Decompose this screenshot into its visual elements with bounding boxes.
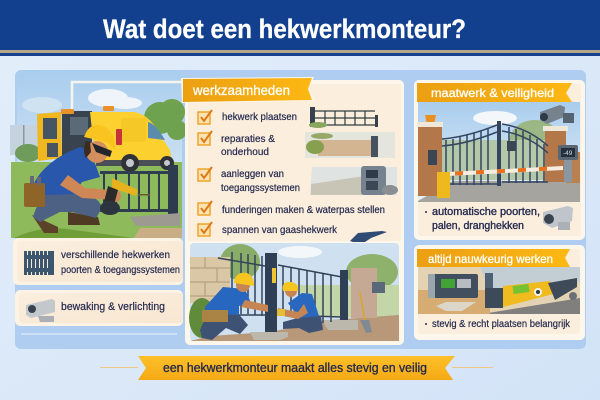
photo: laser and spirit level — [418, 267, 580, 314]
photo: automatic gate — [417, 102, 580, 202]
arms — [60, 175, 113, 200]
panel: werkzaamheden — [181, 77, 404, 345]
text: palen, dranghekken — [432, 220, 524, 232]
trousers — [33, 188, 102, 222]
item: aanleggen — [198, 166, 398, 195]
wall — [189, 257, 230, 338]
heading ribbon — [417, 249, 570, 267]
heading ribbon — [417, 83, 572, 102]
tree — [144, 99, 187, 140]
gate — [442, 124, 548, 185]
worker — [24, 125, 150, 233]
left worker — [200, 273, 268, 340]
ground — [190, 315, 399, 341]
digital meter — [428, 274, 478, 298]
icon: camera — [26, 299, 55, 322]
head — [86, 141, 108, 163]
heading ribbon: werkzaamheden — [192, 82, 290, 98]
icon: camera — [543, 206, 573, 230]
grass — [11, 162, 182, 238]
drill — [112, 178, 138, 196]
item: funderingen — [198, 201, 385, 216]
post — [485, 273, 493, 297]
heading ribbon — [181, 77, 315, 103]
left pillar — [418, 126, 442, 196]
sky — [17, 70, 182, 238]
item: reparaties — [198, 131, 395, 158]
item: gaashekwerk — [198, 222, 387, 242]
van — [37, 106, 174, 172]
shirt — [33, 147, 100, 195]
item: reparaties: onderhoud — [221, 146, 269, 158]
item: aanleggen: aanleggen van — [221, 168, 284, 180]
footer text: een hekwerkmonteur maakt alles stevig en veilig — [163, 360, 427, 375]
camera — [540, 105, 574, 124]
item: gaashekwerk: spannen van gaashekwerk — [222, 224, 338, 236]
card: fences and gates — [13, 238, 183, 285]
card: surveillance and lighting — [15, 290, 183, 326]
right pillar — [545, 130, 566, 182]
hard hat — [84, 125, 115, 150]
title: Wat doet een hekwerkmonteur? — [103, 14, 466, 44]
barrier — [437, 166, 563, 198]
panel: info cards — [13, 238, 183, 334]
item: funderingen: funderingen maken & waterpas stellen — [222, 204, 385, 216]
keypad post — [564, 158, 572, 182]
spirit level — [503, 278, 577, 307]
text: automatische poorten, — [432, 206, 540, 218]
card: fences and gates: poorten & toegangssystemen — [61, 264, 180, 276]
icon: chain-link fence — [10, 125, 38, 155]
panel: blue background — [15, 70, 586, 349]
tool belt — [24, 183, 45, 207]
photo: two installers at gate — [189, 243, 399, 341]
header band — [0, 0, 600, 56]
item: aanleggen: toegangssystemen — [221, 182, 300, 194]
panel: installer scene — [10, 70, 187, 238]
text — [425, 206, 540, 232]
photo: automatic gate: -49 — [563, 150, 573, 157]
item: hekwerk plaatsen — [198, 107, 378, 128]
panel: maatwerk en veiligheid — [414, 80, 585, 240]
shovel — [360, 292, 365, 322]
panel: altijd nauwkeurig werken — [414, 245, 585, 340]
text: bewaking & verlichting — [61, 301, 165, 313]
item: hekwerk plaatsen: hekwerk plaatsen — [222, 111, 297, 123]
footer ribbon — [100, 356, 493, 380]
text: verschillende hekwerken — [61, 249, 170, 261]
text: stevig & recht plaatsen belangrijk — [432, 318, 571, 330]
fence section — [100, 165, 182, 238]
gate — [218, 252, 342, 323]
checklist — [198, 107, 398, 242]
heading ribbon: maatwerk & veiligheid — [431, 86, 554, 100]
boots — [32, 215, 58, 233]
item: reparaties: reparaties & — [221, 133, 275, 145]
icon: fence — [24, 251, 54, 275]
heading ribbon: altijd nauwkeurig werken — [428, 252, 553, 266]
right worker — [277, 282, 323, 333]
